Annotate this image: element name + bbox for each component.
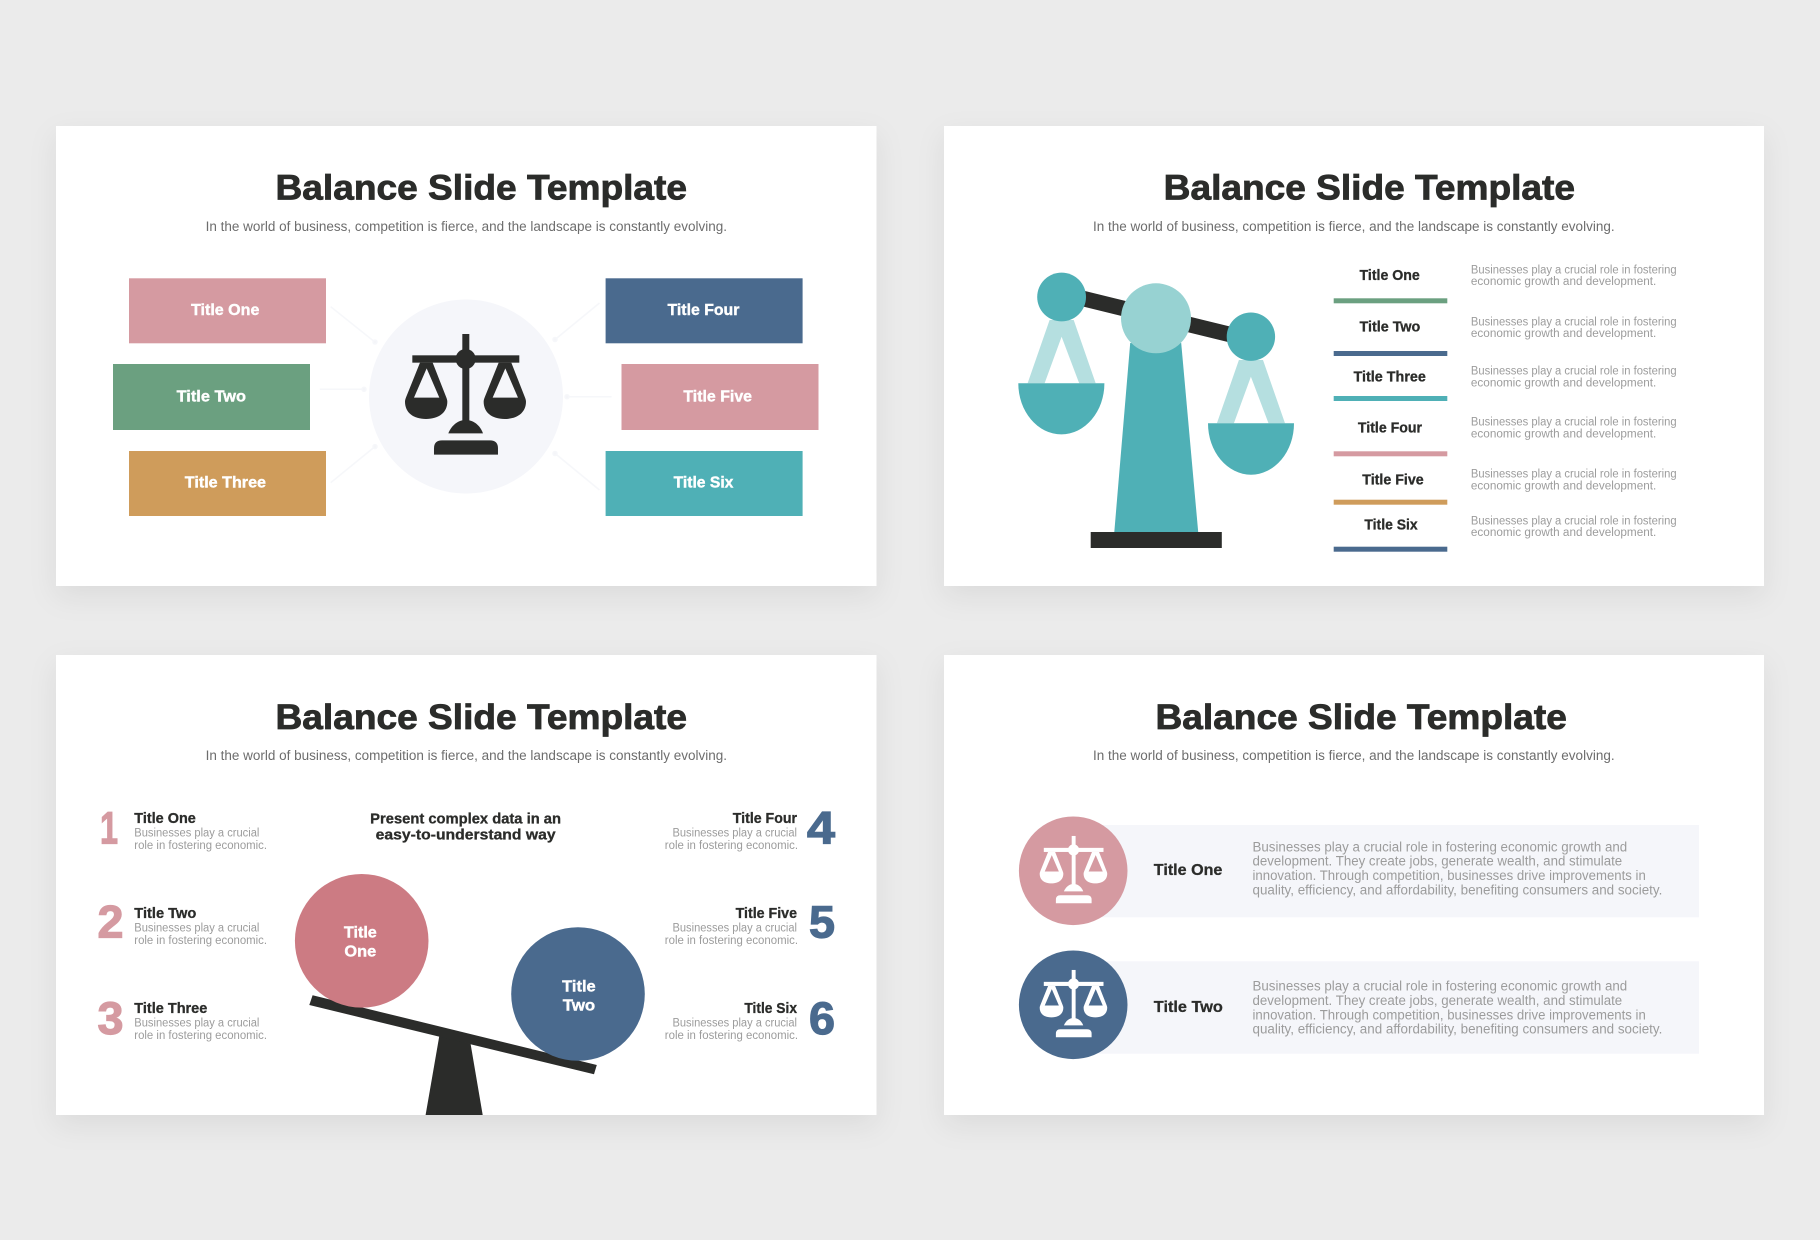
- list item two: economic growth and development.: [1471, 328, 1656, 340]
- item 4: 4: [807, 802, 835, 853]
- item 1: Title One: [134, 811, 196, 827]
- item 5: role in fostering economic.: [665, 935, 798, 947]
- box: title six: Title Six: [674, 475, 733, 492]
- item 6: Title Six: [744, 1001, 797, 1017]
- row: title one: Title One: [1154, 862, 1222, 879]
- list item two: Title Two: [1360, 320, 1420, 336]
- list item one: Businesses play a crucial role in fostering: [1471, 264, 1677, 276]
- box: title five: [622, 364, 818, 430]
- list item four: economic growth and development.: [1471, 428, 1656, 440]
- panel: slide two, teal scale with list: [944, 126, 1764, 586]
- list item one: economic growth and development.: [1471, 276, 1656, 288]
- row: title two: quality, efficiency, and affordability, benefiting consumers and society.: [1252, 1022, 1662, 1037]
- box: title two: Title Two: [177, 389, 246, 406]
- item 1: 1: [100, 802, 118, 853]
- box: title four: [606, 278, 803, 343]
- subtitle: In the world of business, competition is fierce, and the landscape is constantly evolving.: [206, 219, 727, 234]
- illustration: tilted scale: [1018, 273, 1294, 548]
- list item four: Businesses play a crucial role in fostering: [1471, 416, 1677, 428]
- item 6: Businesses play a crucial: [672, 1018, 797, 1030]
- item 2: Businesses play a crucial: [134, 923, 259, 935]
- item 3: 3: [98, 993, 124, 1044]
- box: title one: [129, 278, 326, 343]
- item 4: role in fostering economic.: [665, 840, 798, 852]
- circle: title one: Title: [344, 924, 377, 941]
- item 6: [665, 993, 835, 1044]
- item 1: [100, 802, 267, 853]
- row: title two: Title Two: [1154, 999, 1223, 1016]
- item 4: Title Four: [733, 811, 797, 827]
- item 3: [98, 993, 267, 1044]
- item 2: Title Two: [134, 906, 196, 922]
- box: title three: Title Three: [185, 475, 266, 492]
- item 1: role in fostering economic.: [134, 840, 267, 852]
- list item five: [1334, 468, 1677, 505]
- illustration: seesaw: [295, 874, 645, 1115]
- list item one: [1334, 264, 1677, 303]
- box: title five: Title Five: [683, 389, 752, 406]
- item 2: [98, 896, 267, 947]
- item 4: Businesses play a crucial: [672, 828, 797, 840]
- list item three: Businesses play a crucial role in fostering: [1471, 365, 1677, 377]
- heading: Balance Slide Template: [1164, 168, 1575, 208]
- list item five: Businesses play a crucial role in fostering: [1471, 468, 1677, 480]
- row: title one: quality, efficiency, and affordability, benefiting consumers and society.: [1252, 882, 1662, 897]
- row: title one: development. They create jobs, generate wealth, and stimulate: [1252, 854, 1622, 869]
- item 6: 6: [809, 993, 835, 1044]
- box: title four: Title Four: [668, 302, 739, 319]
- row: title one: [1019, 816, 1699, 925]
- heading: Balance Slide Template: [276, 698, 687, 737]
- center circle: [369, 300, 563, 494]
- list item four: Title Four: [1358, 420, 1422, 436]
- callout text: Present complex data in an: [370, 811, 561, 827]
- subtitle: In the world of business, competition is fierce, and the landscape is constantly evolving.: [1093, 219, 1615, 234]
- item 6: role in fostering economic.: [665, 1030, 798, 1042]
- list item five: Title Five: [1362, 472, 1424, 488]
- panel: slide three, seesaw with numbered items: [56, 655, 876, 1115]
- item 5: Title Five: [736, 906, 797, 922]
- circle: title one: One: [344, 943, 376, 960]
- list item one: Title One: [1360, 268, 1420, 284]
- subtitle: In the world of business, competition is fierce, and the landscape is constantly evolving.: [206, 748, 727, 763]
- list item two: Businesses play a crucial role in fostering: [1471, 316, 1677, 328]
- row: title two: [1019, 950, 1699, 1059]
- row: title one: Businesses play a crucial role in fostering economic growth and: [1252, 839, 1627, 854]
- list item six: [1334, 515, 1677, 552]
- item 5: [665, 896, 835, 947]
- item 2: role in fostering economic.: [134, 935, 267, 947]
- item 2: 2: [98, 896, 124, 947]
- arrows: faint connectors: [320, 303, 612, 490]
- row: title one: innovation. Through competition, businesses drive improvements in: [1252, 868, 1646, 883]
- circle: title two: [511, 927, 645, 1061]
- row: title two: innovation. Through competition, businesses drive improvements in: [1252, 1007, 1646, 1022]
- item 3: role in fostering economic.: [134, 1030, 267, 1042]
- box: title one: Title One: [191, 302, 259, 319]
- box: title six: [606, 451, 803, 516]
- box: title two: [113, 364, 310, 430]
- list item three: economic growth and development.: [1471, 377, 1656, 389]
- heading: Balance Slide Template: [1156, 698, 1567, 737]
- list item six: Title Six: [1364, 517, 1418, 533]
- item 4: [665, 802, 835, 853]
- item 5: 5: [809, 896, 835, 947]
- callout text: easy-to-understand way: [376, 827, 556, 843]
- list item two: [1334, 316, 1677, 356]
- list item three: Title Three: [1354, 370, 1426, 386]
- panel: slide one, six boxes around scales: [56, 126, 876, 586]
- item 3: Title Three: [134, 1001, 207, 1017]
- list item three: [1334, 365, 1677, 401]
- box: title three: [129, 451, 326, 516]
- circle: title two: Two: [563, 997, 595, 1014]
- item 5: Businesses play a crucial: [672, 923, 797, 935]
- list item six: economic growth and development.: [1471, 527, 1656, 539]
- list item six: Businesses play a crucial role in fostering: [1471, 515, 1677, 527]
- icon: white scales: [1040, 836, 1107, 903]
- callout text: [370, 811, 561, 843]
- subtitle: In the world of business, competition is fierce, and the landscape is constantly evolving.: [1093, 748, 1615, 763]
- circle: title one: [295, 874, 429, 1008]
- icon: white scales: [1040, 970, 1107, 1037]
- item 3: Businesses play a crucial: [134, 1018, 259, 1030]
- row: title two: development. They create jobs, generate wealth, and stimulate: [1252, 993, 1622, 1008]
- panel: slide four, two icon rows: [944, 655, 1764, 1115]
- row: title two: Businesses play a crucial role in fostering economic growth and: [1252, 979, 1627, 994]
- list item four: [1334, 416, 1677, 456]
- icon: scales: [405, 334, 526, 455]
- heading: Balance Slide Template: [276, 168, 687, 208]
- circle: title two: Title: [562, 978, 596, 995]
- list item five: economic growth and development.: [1471, 480, 1656, 492]
- item 1: Businesses play a crucial: [134, 828, 259, 840]
